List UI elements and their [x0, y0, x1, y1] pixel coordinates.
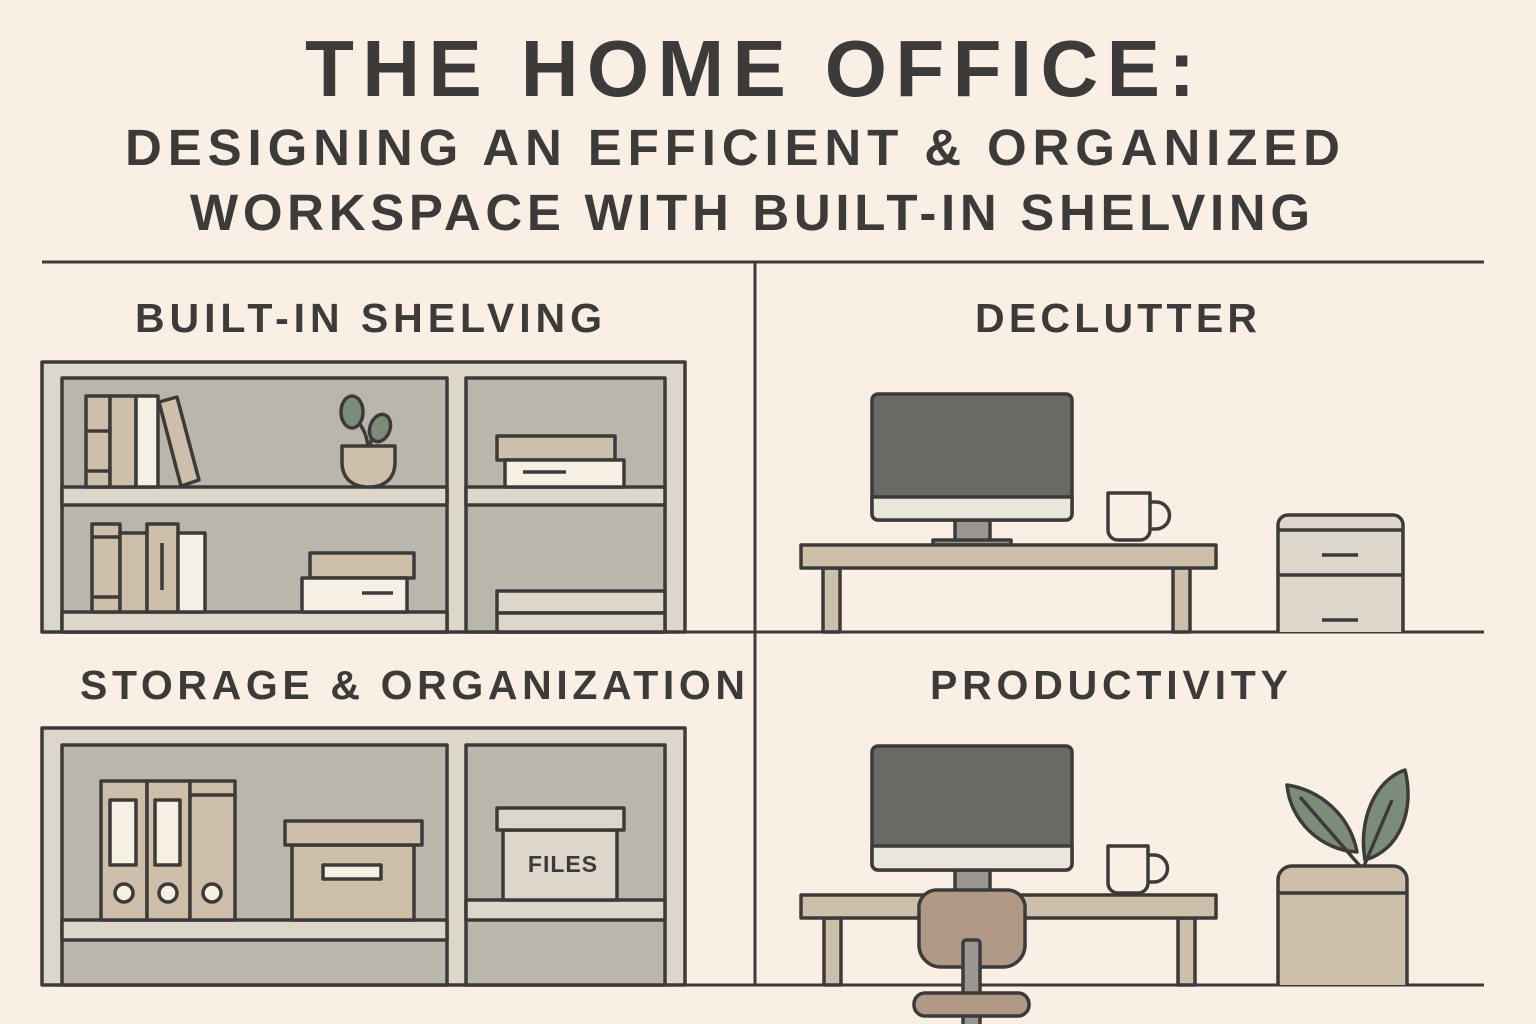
heading: productivity: PRODUCTIVITY [930, 662, 1288, 708]
heading: declutter: DECLUTTER [975, 295, 1257, 341]
heading: storage & organization: STORAGE & ORGANIZATION [80, 662, 745, 708]
monitor [872, 394, 1072, 545]
binders [101, 781, 235, 920]
icon: plant [1278, 770, 1408, 985]
files box [497, 808, 624, 900]
title [125, 24, 1340, 241]
desk [801, 895, 1216, 985]
cabinet [1278, 515, 1403, 632]
boxes bottom [302, 553, 414, 612]
boxes top right [497, 436, 624, 487]
desk [801, 545, 1216, 632]
chair [914, 890, 1029, 1024]
panel: productivity desk [801, 746, 1408, 1024]
mug [1108, 846, 1168, 893]
panel: declutter desk [801, 394, 1403, 632]
title: DESIGNING AN EFFICIENT & ORGANIZED [125, 119, 1340, 176]
panel: built-in shelving unit [42, 362, 685, 632]
monitor [872, 746, 1072, 898]
title: WORKSPACE WITH BUILT-IN SHELVING [190, 184, 1310, 241]
books bottom [92, 524, 205, 612]
title: THE HOME OFFICE: [305, 24, 1195, 113]
storage box [285, 821, 422, 920]
books top [86, 396, 199, 487]
panel: storage unit [42, 728, 685, 985]
heading: built-in shelving: BUILT-IN SHELVING [135, 295, 602, 341]
icon: plant pot [341, 396, 395, 487]
mug [1108, 493, 1170, 540]
files box: FILES [528, 851, 598, 877]
